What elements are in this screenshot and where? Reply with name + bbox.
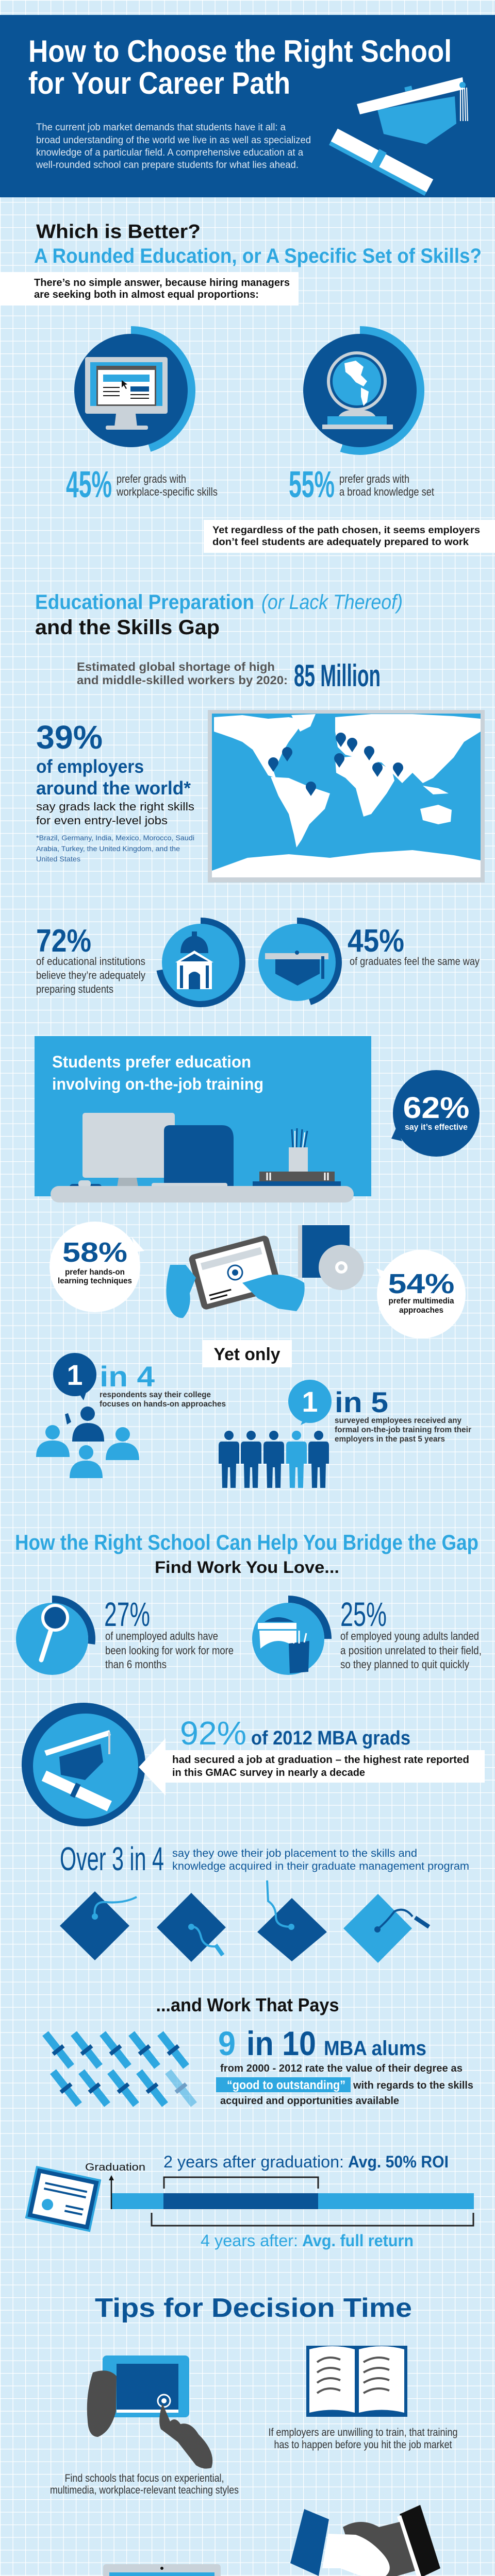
stat: 72% institutions: preparing students: [36, 984, 113, 995]
stat: over 3 in 4: Over 3 in 4: [60, 1840, 164, 1877]
bubble: 54% multimedia: prefer multimedia: [389, 1297, 454, 1306]
intro paragraph: broad understanding of the world we live in as well as specialized: [36, 135, 311, 146]
callout: employers not prepared: Yet regardless of the path chosen, it seems employers: [212, 525, 480, 536]
footnote: Arabia, Turkey, the United Kingdom, and the: [36, 844, 180, 853]
stat: over 3 in 4: say they owe their job placement to the skills and: [172, 1848, 417, 1859]
chart: 55% donut with globe: [300, 330, 420, 451]
bubble: 58% hands-on: [50, 1222, 144, 1312]
bubble: 58% hands-on: prefer hands-on: [65, 1268, 125, 1277]
bubble: 54% multimedia: [376, 1250, 466, 1338]
stat: 25% unrelated position: 25%: [340, 1595, 387, 1633]
stat: 1 in 4: 1: [67, 1359, 83, 1391]
stat: 85 million shortage: Estimated global shortage of high: [77, 660, 275, 673]
icon: open book: [306, 2346, 407, 2417]
bubble: 62% say it's effective: [391, 1070, 480, 1157]
intro paragraph: well-rounded school can prepare students for what lies ahead.: [36, 160, 299, 171]
stat: 55% broad knowledge: prefer grads with: [339, 472, 409, 485]
stat: 1 in 5: employers in the past 5 years: [335, 1435, 445, 1444]
stat: 45% graduates: [348, 923, 480, 968]
stat: 1 in 4: respondents say their college: [100, 1391, 211, 1399]
stat: 1 in 4: in 4: [100, 1360, 155, 1393]
stat: 45% workplace skills: [66, 464, 218, 505]
stat: 9 in 10 MBA alums: “good to outstanding”: [227, 2078, 345, 2092]
callout arrow: 92% MBA grads: 92%: [180, 1715, 246, 1752]
stat: 1 in 5: surveyed employees received any: [335, 1416, 461, 1425]
panel title: [52, 1053, 263, 1093]
stat: 39% of employers: for even entry-level jobs: [36, 814, 168, 827]
icon: standing people: [219, 1431, 329, 1488]
timeline chart: ROI: 4 years after:: [201, 2231, 298, 2250]
stat: 39% of employers: of employers: [36, 756, 144, 777]
footnote: *Brazil, Germany, India, Mexico, Morocco, Saudi: [36, 834, 194, 842]
stat: 72% institutions: [36, 923, 145, 995]
icon: globe: [322, 353, 393, 429]
stat: 72% institutions: 72%: [36, 923, 91, 959]
stat: 45% workplace skills: 45%: [66, 464, 112, 505]
stat: 1 in 5: [288, 1380, 471, 1444]
icon: classroom people: [36, 1406, 139, 1478]
stat: 85 million shortage: [77, 658, 381, 693]
stat: 72% institutions: believe they’re adequately: [36, 970, 145, 981]
heading: educational preparation: Educational Preparation: [35, 591, 254, 614]
icon: diploma certificate: [26, 2167, 100, 2231]
stat: 25% unrelated position: [340, 1595, 482, 1671]
stat: 39% of employers: 39%: [36, 719, 103, 756]
heading: educational preparation: (or Lack Thereof): [261, 591, 403, 614]
callout: employers not prepared: don’t feel students are adequately prepared to work: [212, 537, 469, 548]
timeline chart: ROI: Graduation: [85, 2162, 145, 2173]
chart: 25% donut with burger: [249, 1599, 328, 1679]
bubble: 58% hands-on: 58%: [62, 1237, 127, 1268]
map pins: [268, 733, 403, 796]
header banner: [0, 15, 495, 197]
stat: 9 in 10 MBA alums: from 2000 - 2012 rate the value of their degree as: [220, 2063, 463, 2074]
icon: handshake: [290, 2505, 440, 2576]
heading: tips for decision time: Tips for Decision Time: [95, 2293, 412, 2323]
callout: Yet only: Yet only: [213, 1345, 280, 1364]
tip: employers unwilling to train: If employers are unwilling to train, that training: [268, 2427, 458, 2438]
title: for Your Career Path: [28, 66, 290, 100]
icon: four mortarboards: [60, 1880, 429, 1963]
stat: 1 in 4: [53, 1353, 226, 1409]
panel title: Students prefer education: [52, 1053, 251, 1071]
stat: 55% broad knowledge: [289, 464, 434, 505]
bubble: 62% say it's effective: say it’s effective: [405, 1122, 468, 1132]
icon: tablet with hands: [166, 1234, 305, 1318]
stat: 27% unemployed: [104, 1595, 234, 1671]
stat: 27% unemployed: 27%: [104, 1595, 150, 1633]
stat: 85 million shortage: 85 Million: [294, 658, 381, 693]
icon: graduation cap and diploma: [329, 77, 468, 196]
title: How to Choose the Right School: [28, 34, 452, 69]
intro paragraph: knowledge of a particular field. A comprehensive education at a: [36, 147, 303, 158]
callout: no simple answer: There’s no simple answer, because hiring managers: [34, 277, 290, 289]
icon: building: [175, 931, 213, 989]
callout arrow: 92% MBA grads: had secured a job at graduation – the highest rate reported: [172, 1754, 469, 1766]
panel title: involving on-the-job training: [52, 1075, 263, 1093]
tip: employers unwilling to train: [268, 2427, 458, 2451]
stat: 27% unemployed: than 6 months: [105, 1658, 167, 1671]
chart: 45% donut with cap: [256, 921, 338, 1004]
stat: 9 in 10 MBA alums: with regards to the skills: [353, 2080, 473, 2091]
stat: 55% broad knowledge: a broad knowledge set: [339, 485, 434, 498]
subheading: find work you love: Find Work You Love...: [155, 1558, 339, 1577]
stat: 55% broad knowledge: 55%: [289, 464, 335, 505]
stat: 85 million shortage: and middle-skilled workers by 2020:: [77, 673, 288, 687]
heading: Which is Better?: Which is Better?: [36, 221, 201, 243]
icon: cap: [265, 951, 328, 986]
panel: students prefer on-the-job training: [35, 1036, 371, 1202]
timeline chart: ROI: Avg. full return: [302, 2231, 414, 2250]
stat: 45% workplace skills: workplace-specific skills: [116, 485, 218, 498]
stat: over 3 in 4: [60, 1840, 469, 1877]
chart: 27% donut with magnifier: [12, 1599, 92, 1679]
timeline chart: ROI: 2 years after graduation:: [163, 2153, 344, 2171]
stat: 72% institutions: of educational institutions: [36, 956, 145, 968]
subheading: work that pays: ...and Work That Pays: [156, 1994, 339, 2015]
timeline chart: ROI: [85, 2153, 474, 2250]
world map: [208, 710, 485, 883]
bubble: 58% hands-on: learning techniques: [58, 1277, 132, 1285]
icon: ten diplomas: [45, 2033, 194, 2105]
stat: 9 in 10 MBA alums: in 10: [246, 2024, 316, 2062]
stat: 9 in 10 MBA alums: MBA alums: [324, 2037, 426, 2060]
stat: 25% unrelated position: so they planned to quit quickly: [340, 1658, 469, 1671]
footnote: United States: [36, 855, 80, 863]
callout: no simple answer: [0, 272, 299, 306]
icon: laptop: [84, 2564, 240, 2576]
icon: desk scene: [70, 1113, 341, 1193]
intro paragraph: The current job market demands that students have it all: a: [36, 122, 286, 133]
callout arrow: 92% MBA grads: [139, 1715, 485, 1795]
callout: no simple answer: are seeking both in almost equal proportions:: [34, 289, 259, 300]
stat: 1 in 5: formal on-the-job training from their: [335, 1426, 471, 1434]
stat: 39% of employers: say grads lack the right skills: [36, 800, 194, 813]
timeline chart: ROI: Avg. 50% ROI: [348, 2153, 449, 2171]
tip: experiential schools: Find schools that focus on experiential,: [65, 2472, 224, 2484]
stat: 9 in 10 MBA alums: 9: [218, 2024, 236, 2062]
stat: over 3 in 4: knowledge acquired in their graduate management program: [172, 1860, 469, 1872]
bubble: 54% multimedia: 54%: [388, 1268, 455, 1299]
stat: 27% unemployed: been looking for work for more: [105, 1644, 234, 1657]
stat: 9 in 10 MBA alums: acquired and opportunities available: [220, 2095, 399, 2107]
stat: 39% of employers: around the world*: [36, 777, 191, 799]
stat: 27% unemployed: of unemployed adults have: [105, 1630, 218, 1642]
stat: 9 in 10 MBA alums: [216, 2024, 473, 2107]
stat: 45% graduates: 45%: [348, 923, 404, 959]
callout arrow: 92% MBA grads: of 2012 MBA grads: [251, 1727, 410, 1749]
stat: 39% of employers: [36, 719, 194, 863]
stat: 1 in 4: focuses on hands-on approaches: [100, 1400, 226, 1409]
stat: 1 in 5: in 5: [335, 1386, 388, 1418]
footnote: [36, 834, 194, 863]
callout arrow: 92% MBA grads: in this GMAC survey in nearly a decade: [172, 1767, 365, 1778]
chart: 45% donut with monitor: [71, 330, 191, 451]
icon: monitor: [85, 357, 168, 430]
chart: 72% donut with building: [159, 921, 242, 1004]
heading: educational preparation: and the Skills Gap: [35, 616, 220, 639]
callout: employers not prepared: [204, 520, 495, 553]
title: [28, 34, 452, 100]
desk surface: [51, 1186, 354, 1202]
icon: tablet with gray hands: [87, 2355, 212, 2469]
tip: experiential schools: multimedia, workplace-relevant teaching styles: [50, 2484, 239, 2496]
bubble: 54% multimedia: approaches: [399, 1306, 443, 1315]
bubble: 62% say it's effective: 62%: [403, 1091, 469, 1125]
stat: 1 in 5: 1: [302, 1385, 318, 1418]
tip: employers unwilling to train: has to happen before you hit the job market: [274, 2439, 452, 2451]
icon: 92% circle with cap and diploma: [22, 1703, 145, 1826]
tip: experiential schools: [50, 2472, 239, 2496]
heading: educational preparation: [35, 591, 403, 639]
callout: Yet only: [202, 1340, 292, 1367]
intro paragraph: [36, 122, 311, 171]
icon: cd case: [298, 1225, 364, 1290]
stat: 45% workplace skills: prefer grads with: [117, 472, 186, 485]
